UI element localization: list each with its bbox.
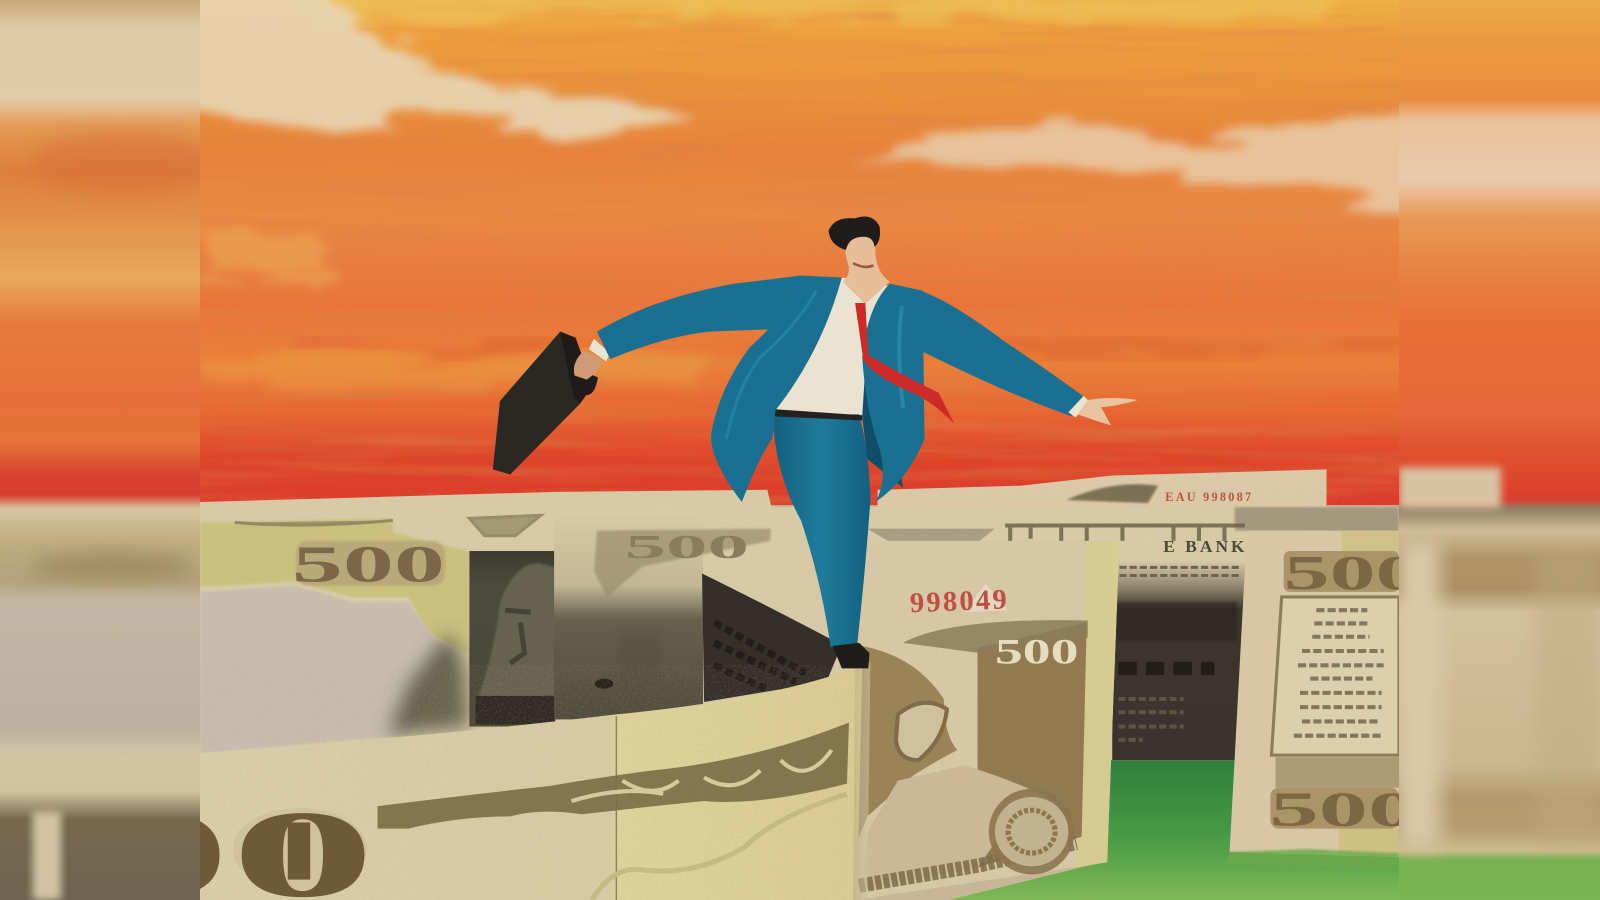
jacket left sheen [727, 291, 816, 439]
shirt [772, 278, 888, 418]
cloud: upper left [173, 0, 694, 131]
portrait ear [896, 703, 947, 760]
jacket right panel [862, 284, 927, 502]
left note yellow guilloche patch [200, 518, 469, 653]
front rolled note [200, 665, 862, 900]
seal [989, 789, 1074, 874]
shadow cast on left note [388, 633, 469, 735]
left note 500 numeral: 500 [292, 537, 445, 594]
dark folded note back [702, 573, 842, 702]
red serial number: 998049 [909, 584, 1010, 619]
right dark gap: E BANK [1163, 537, 1248, 556]
engraved panel [978, 622, 1087, 867]
cloud: upper right [858, 108, 1399, 220]
back note with serial number [878, 469, 1327, 507]
dark gap with Gandhi portrait [469, 551, 555, 727]
left arm [597, 276, 801, 359]
left note watermark window [200, 586, 454, 753]
hair [829, 217, 880, 250]
centre-left note with 500 numeral and shadow: 500 [624, 529, 749, 566]
large 00 numeral on roll [86, 785, 376, 900]
trousers [772, 414, 870, 647]
right note bottom numeral [1270, 788, 1399, 829]
ornament on roll [378, 722, 849, 829]
briefcase [493, 332, 594, 474]
panel: blurred left side [0, 0, 214, 900]
panel: blurred right side [1399, 0, 1600, 900]
businessman [493, 217, 1138, 668]
right dark gap [1112, 537, 1248, 760]
grass [949, 760, 1399, 900]
portrait shawl [868, 766, 1029, 888]
lower scalloped edge [592, 794, 847, 900]
right note text block [1271, 597, 1399, 755]
jacket left panel [711, 276, 842, 502]
ornament strip on wide note [867, 529, 995, 541]
shoe [833, 643, 869, 668]
tie [855, 303, 954, 423]
bottom inscription [859, 843, 1077, 886]
centre-left note with 500 numeral and shadow [554, 510, 770, 719]
roll edge shading [853, 653, 870, 900]
back note with serial number: EAU 998087 [1165, 490, 1253, 504]
wide note base [200, 490, 1399, 776]
sky background [200, 0, 1399, 505]
serial triangle [964, 584, 1008, 612]
belt [773, 409, 862, 420]
small 500 numeral: 500 [995, 631, 1079, 671]
jacket right sheen [899, 306, 903, 408]
ornament above engraved panel [903, 620, 1088, 653]
portrait head [855, 645, 957, 847]
right note bottom numeral: 500 [1269, 782, 1417, 837]
right note [1230, 530, 1399, 858]
centre note with serial number and portrait [702, 541, 1119, 900]
grass fringe [1224, 849, 1399, 867]
jacket inner shadow [862, 367, 903, 488]
small ornaments at top of left note [235, 515, 541, 536]
left hand [574, 351, 602, 380]
left note 500 numeral [296, 540, 446, 586]
right hand [1078, 398, 1138, 426]
right note top numeral [1284, 551, 1399, 592]
heading script on wide note [1005, 526, 1245, 541]
right note ornament [1276, 757, 1399, 788]
dark band at top of right note [1235, 507, 1399, 533]
paper grain [202, 490, 1397, 505]
left cuff [589, 339, 610, 361]
right note top numeral: 500 [1284, 545, 1421, 600]
neck and face [843, 231, 890, 304]
right arm [913, 289, 1086, 416]
right cuff [1068, 396, 1090, 417]
